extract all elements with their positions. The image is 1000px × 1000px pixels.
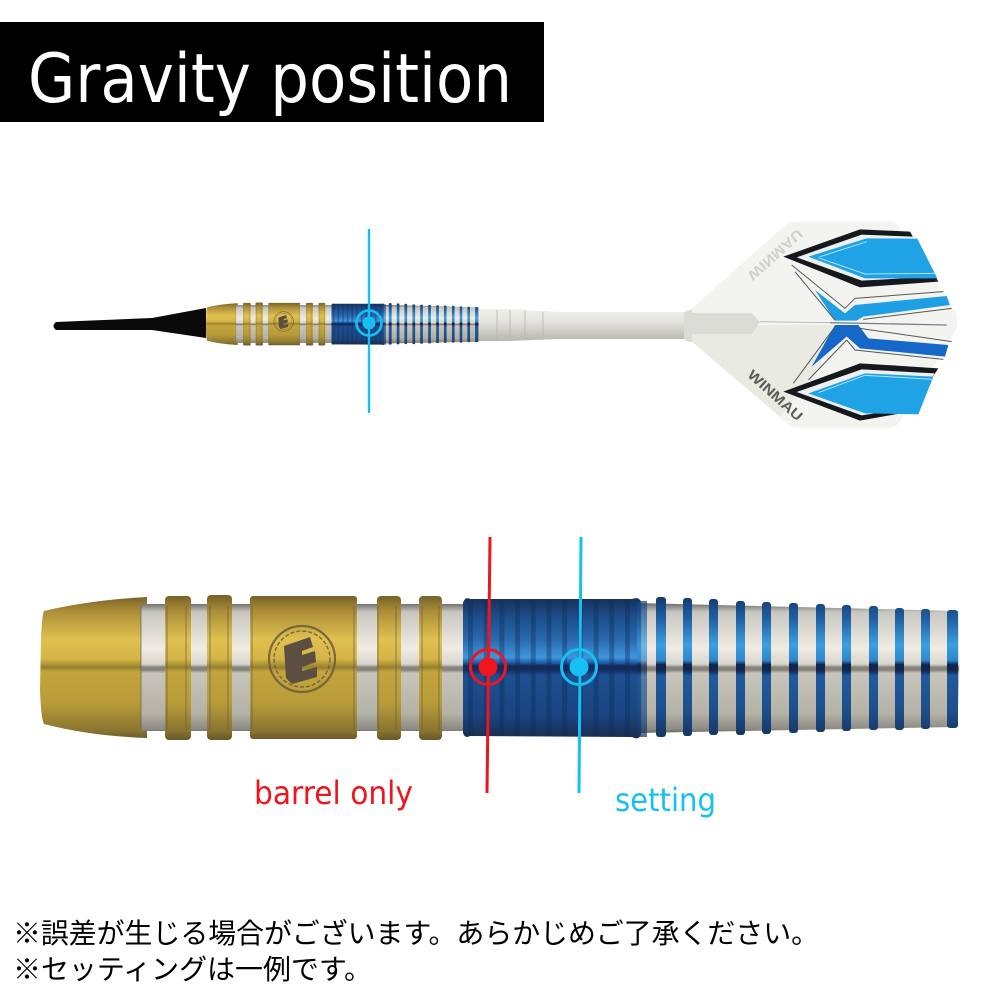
label: setting: setting [615, 781, 716, 819]
whole dart illustration [54, 222, 958, 428]
shaft [478, 309, 685, 341]
flight [690, 222, 958, 428]
enlarged barrel [40, 595, 959, 740]
logo: printed flight wordmark: WINMAU [745, 366, 806, 424]
barrel-only gravity marker [470, 537, 506, 793]
title banner: Gravity position [28, 40, 512, 119]
footnotes: ※セッティングは一例です。 [13, 954, 372, 985]
small barrel [206, 303, 479, 346]
footnotes [13, 918, 819, 985]
shaft ripples [497, 310, 543, 341]
logo: faded mirrored wordmark: WINMAU [745, 226, 806, 284]
gravity marker on whole dart [356, 229, 382, 413]
footnotes: ※誤差が生じる場合がございます。あらかじめご了承ください。 [13, 918, 819, 949]
setting gravity marker [562, 537, 596, 793]
shaft collar and stem [684, 310, 760, 342]
label: barrel only: barrel only [254, 774, 413, 812]
soft tip [54, 308, 206, 338]
